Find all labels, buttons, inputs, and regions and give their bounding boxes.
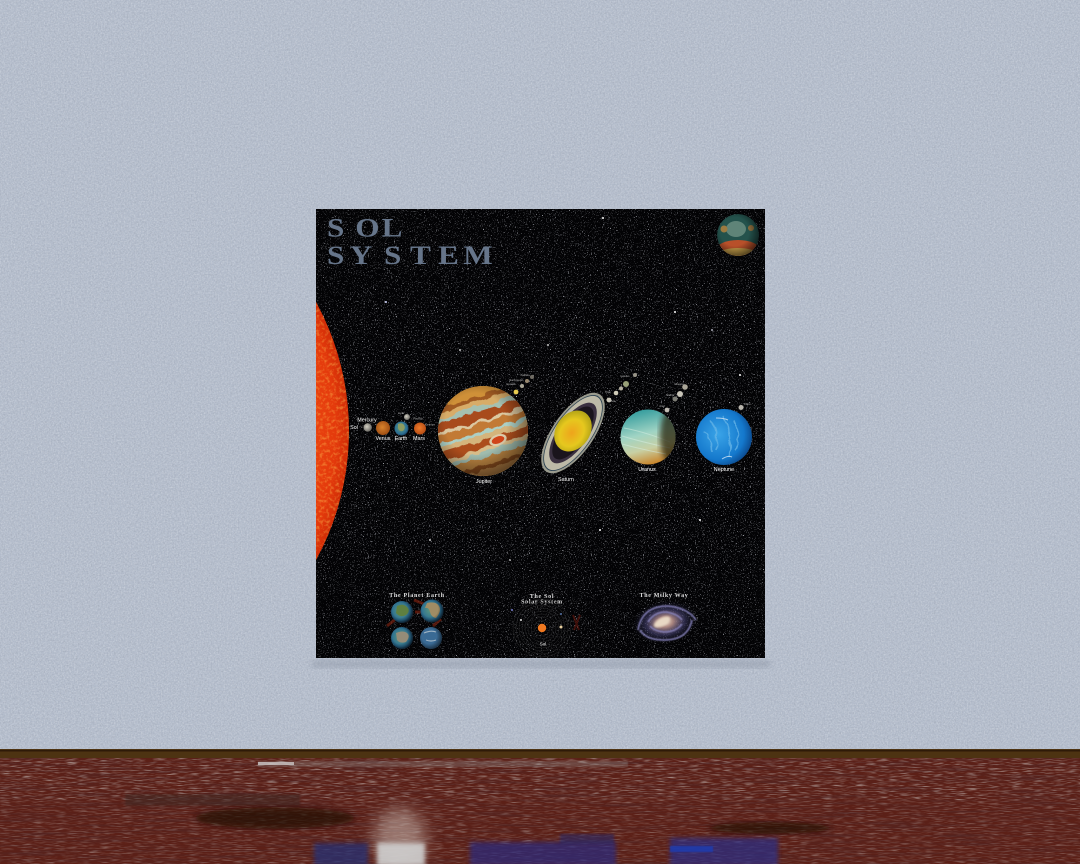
icon: decorative planet, top right bbox=[717, 214, 759, 256]
moons of Uranus: Oberon bbox=[674, 382, 684, 386]
planet: Mercury: Mercury bbox=[357, 418, 377, 424]
diagram: orbits bbox=[513, 599, 571, 657]
planet: Uranus: Uranus bbox=[638, 467, 656, 473]
planet: Mercury bbox=[357, 418, 377, 432]
icon: four Earth views bbox=[387, 600, 444, 649]
planet: Venus bbox=[376, 421, 390, 440]
heading: SOL SYSTEM: SYSTEM bbox=[327, 241, 493, 270]
panel: The Sol Solar System bbox=[511, 594, 580, 657]
moons of Jupiter bbox=[506, 373, 534, 394]
planet: Mars with moons: Mars bbox=[413, 436, 425, 442]
icon: sun and orbiting bodies bbox=[511, 609, 580, 632]
planet: Neptune bbox=[696, 409, 752, 472]
panel: The Sol Solar System: The Sol bbox=[530, 594, 554, 600]
moons of Uranus bbox=[659, 382, 688, 412]
moons of Jupiter: Ganymede bbox=[509, 378, 523, 382]
planet: Venus: Venus bbox=[376, 436, 391, 442]
poster: Sol System bbox=[316, 209, 765, 658]
moons of Jupiter: Europa bbox=[506, 382, 516, 386]
panel: The Sol Solar System: Sol bbox=[540, 642, 546, 646]
planet: Uranus bbox=[620, 410, 676, 471]
poster drop shadow bbox=[312, 660, 770, 668]
sun bbox=[316, 302, 349, 560]
panel: The Planet Earth: The Planet Earth bbox=[389, 593, 445, 599]
planet: Earth with Luna: Earth bbox=[395, 436, 407, 442]
panel: The Milky Way bbox=[636, 592, 698, 642]
label: Sol: Sol bbox=[350, 425, 358, 431]
panel: The Milky Way: The Milky Way bbox=[640, 593, 688, 599]
planet: Mars with moons: Deimos bbox=[425, 422, 435, 426]
heading: SOL SYSTEM bbox=[328, 219, 492, 264]
moon of Neptune: Triton bbox=[738, 403, 750, 410]
planet: Neptune: Neptune bbox=[714, 467, 734, 473]
icon: spiral galaxy bbox=[636, 602, 698, 642]
wooden baseboard bbox=[0, 749, 1080, 759]
moons of Saturn: Iapetus bbox=[620, 374, 630, 378]
planet: Saturn: Saturn bbox=[558, 477, 574, 483]
planet: Jupiter: Jupiter bbox=[476, 479, 492, 485]
moons of Uranus: Titania bbox=[666, 393, 675, 397]
planet: Earth with Luna: Luna bbox=[398, 411, 405, 415]
panel: The Sol Solar System: Solar System bbox=[521, 600, 563, 606]
moons of Jupiter: Callisto bbox=[520, 373, 530, 377]
moons of Uranus: Ariel bbox=[659, 404, 665, 408]
planet: Mars with moons bbox=[413, 418, 435, 440]
planet: Jupiter bbox=[438, 386, 528, 484]
planet: Saturn bbox=[541, 392, 605, 481]
reflective wood floor bbox=[0, 758, 1080, 864]
planet: Mars with moons: Phobos bbox=[413, 416, 423, 420]
moons of Saturn: Titan bbox=[605, 390, 611, 394]
moons of Saturn bbox=[605, 373, 637, 403]
panel: The Planet Earth bbox=[387, 593, 445, 649]
moon of Neptune: Triton: Triton bbox=[743, 402, 751, 406]
moons of Saturn: Rhea bbox=[609, 399, 616, 403]
heading: SOL SYSTEM: SOL bbox=[327, 214, 402, 243]
planet: Earth with Luna bbox=[394, 411, 410, 442]
star field bbox=[316, 209, 765, 658]
